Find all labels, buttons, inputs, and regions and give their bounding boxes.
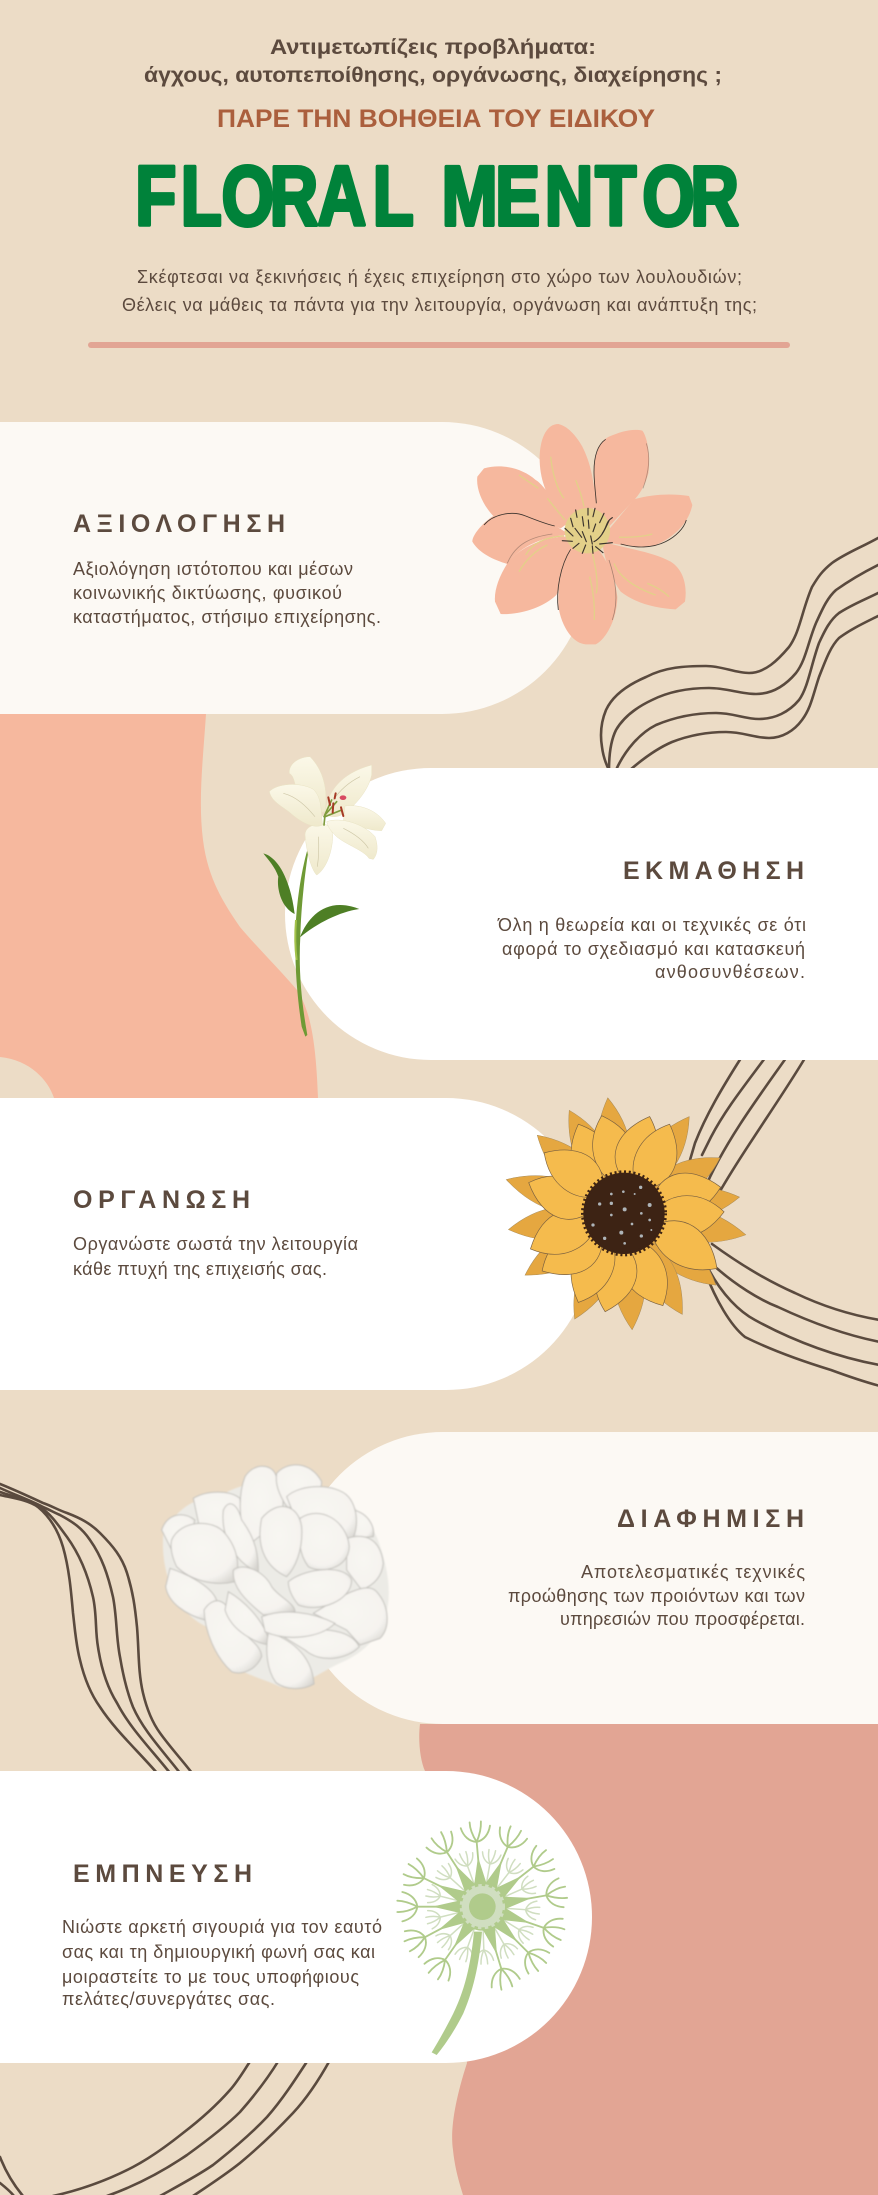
- heading: question: [144, 36, 722, 87]
- background shape: salmon blob: [419, 1724, 878, 2195]
- text block: ΔΙΑΦΗΜΙΣΗ: υπηρεσιών που προσφέρεται.: [560, 1609, 805, 1629]
- text block: ΑΞΙΟΛΟΓΗΣΗ: Αξιολόγηση ιστότοπου και μέσων: [73, 559, 353, 579]
- panel: ΕΜΠΝΕΥΣΗ: [0, 1771, 592, 2063]
- text block: ΔΙΑΦΗΜΙΣΗ: προώθησης των προιόντων και των: [508, 1586, 805, 1606]
- panel: ΑΞΙΟΛΟΓΗΣΗ: [0, 422, 588, 714]
- icon: peach flower: [472, 424, 692, 644]
- decorative wavy lines: middle right: [690, 1058, 878, 1386]
- text block: ΑΞΙΟΛΟΓΗΣΗ: [73, 510, 381, 627]
- text block: ΕΚΜΑΘΗΣΗ: ΕΚΜΑΘΗΣΗ: [623, 857, 804, 885]
- text block: ΕΚΜΑΘΗΣΗ: Όλη η θεωρεία και οι τεχνικές σε ότι: [497, 915, 806, 935]
- heading: question: Αντιμετωπίζεις προβλήματα:: [270, 36, 596, 59]
- text block: ΕΜΠΝΕΥΣΗ: σας και τη δημιουργική φωνή σας και: [62, 1942, 375, 1962]
- subheading: call to action: ΠΑΡΕ ΤΗΝ ΒΟΗΘΕΙΑ ΤΟΥ ΕΙΔΙΚΟΥ: [217, 105, 655, 133]
- text block: ΑΞΙΟΛΟΓΗΣΗ: κοινωνικής δικτύωσης, φυσικού: [73, 583, 342, 603]
- intro text: Θέλεις να μάθεις τα πάντα για την λειτουργία, οργάνωση και ανάπτυξη της;: [122, 295, 757, 315]
- divider rule: [88, 342, 790, 348]
- text block: ΟΡΓΑΝΩΣΗ: [73, 1186, 358, 1279]
- decorative wavy lines: bottom left: [0, 2060, 330, 2195]
- panel: ΕΚΜΑΘΗΣΗ: [285, 768, 878, 1060]
- text block: ΔΙΑΦΗΜΙΣΗ: ΔΙΑΦΗΜΙΣΗ: [617, 1505, 804, 1533]
- intro text: Σκέφτεσαι να ξεκινήσεις ή έχεις επιχείρηση στο χώρο των λουλουδιών;: [137, 267, 742, 287]
- background shape: peach blob: [0, 714, 318, 1098]
- text block: ΔΙΑΦΗΜΙΣΗ: [508, 1505, 805, 1629]
- text block: ΕΜΠΝΕΥΣΗ: [62, 1860, 382, 2009]
- text block: ΟΡΓΑΝΩΣΗ: κάθε πτυχή της επιχεισής σας.: [73, 1259, 327, 1279]
- text block: ΕΜΠΝΕΥΣΗ: πελάτες/συνεργάτες σας.: [62, 1989, 275, 2009]
- text block: ΟΡΓΑΝΩΣΗ: Οργανώστε σωστά την λειτουργία: [73, 1234, 358, 1254]
- icon: white peony: [162, 1465, 389, 1689]
- title: Floral Mentor: FLORAL MENTOR: [135, 150, 739, 244]
- heading: question: άγχους, αυτοπεποίθησης, οργάνωσης, διαχείρησης ;: [144, 64, 722, 87]
- icon: dandelion: [397, 1821, 569, 2055]
- intro text: [122, 267, 757, 315]
- panel: ΟΡΓΑΝΩΣΗ: [0, 1098, 592, 1390]
- text block: ΔΙΑΦΗΜΙΣΗ: Αποτελεσματικές τεχνικές: [581, 1562, 805, 1582]
- text block: ΕΜΠΝΕΥΣΗ: ΕΜΠΝΕΥΣΗ: [73, 1860, 252, 1888]
- text block: ΑΞΙΟΛΟΓΗΣΗ: ΑΞΙΟΛΟΓΗΣΗ: [73, 510, 285, 538]
- panel: ΔΙΑΦΗΜΙΣΗ: [297, 1432, 878, 1724]
- decorative wavy lines: top right: [601, 538, 878, 770]
- text block: ΕΚΜΑΘΗΣΗ: [497, 857, 806, 982]
- text block: ΑΞΙΟΛΟΓΗΣΗ: καταστήματος, στήσιμο επιχείρησης.: [73, 607, 381, 627]
- icon: sunflower: [502, 1096, 749, 1331]
- text block: ΟΡΓΑΝΩΣΗ: ΟΡΓΑΝΩΣΗ: [73, 1186, 250, 1214]
- text block: ΕΚΜΑΘΗΣΗ: αφορά το σχεδιασμό και κατασκευή: [502, 939, 805, 959]
- decorative wavy lines: left: [0, 1484, 192, 1773]
- text block: ΕΜΠΝΕΥΣΗ: μοιραστείτε το με τους υποφήφιους: [62, 1967, 359, 1987]
- text block: ΕΚΜΑΘΗΣΗ: ανθοσυνθέσεων.: [655, 962, 805, 982]
- icon: white lily: [263, 757, 386, 1037]
- text block: ΕΜΠΝΕΥΣΗ: Νιώστε αρκετή σιγουριά για τον εαυτό: [62, 1917, 382, 1937]
